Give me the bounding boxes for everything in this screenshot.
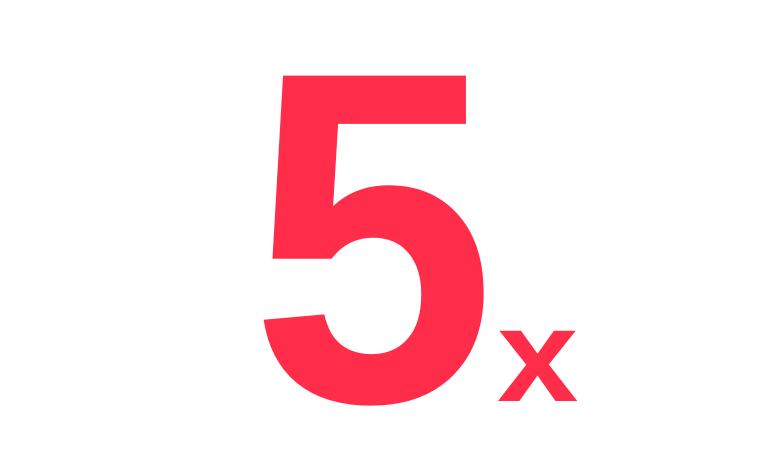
small multiplier x: x bbox=[497, 282, 578, 430]
